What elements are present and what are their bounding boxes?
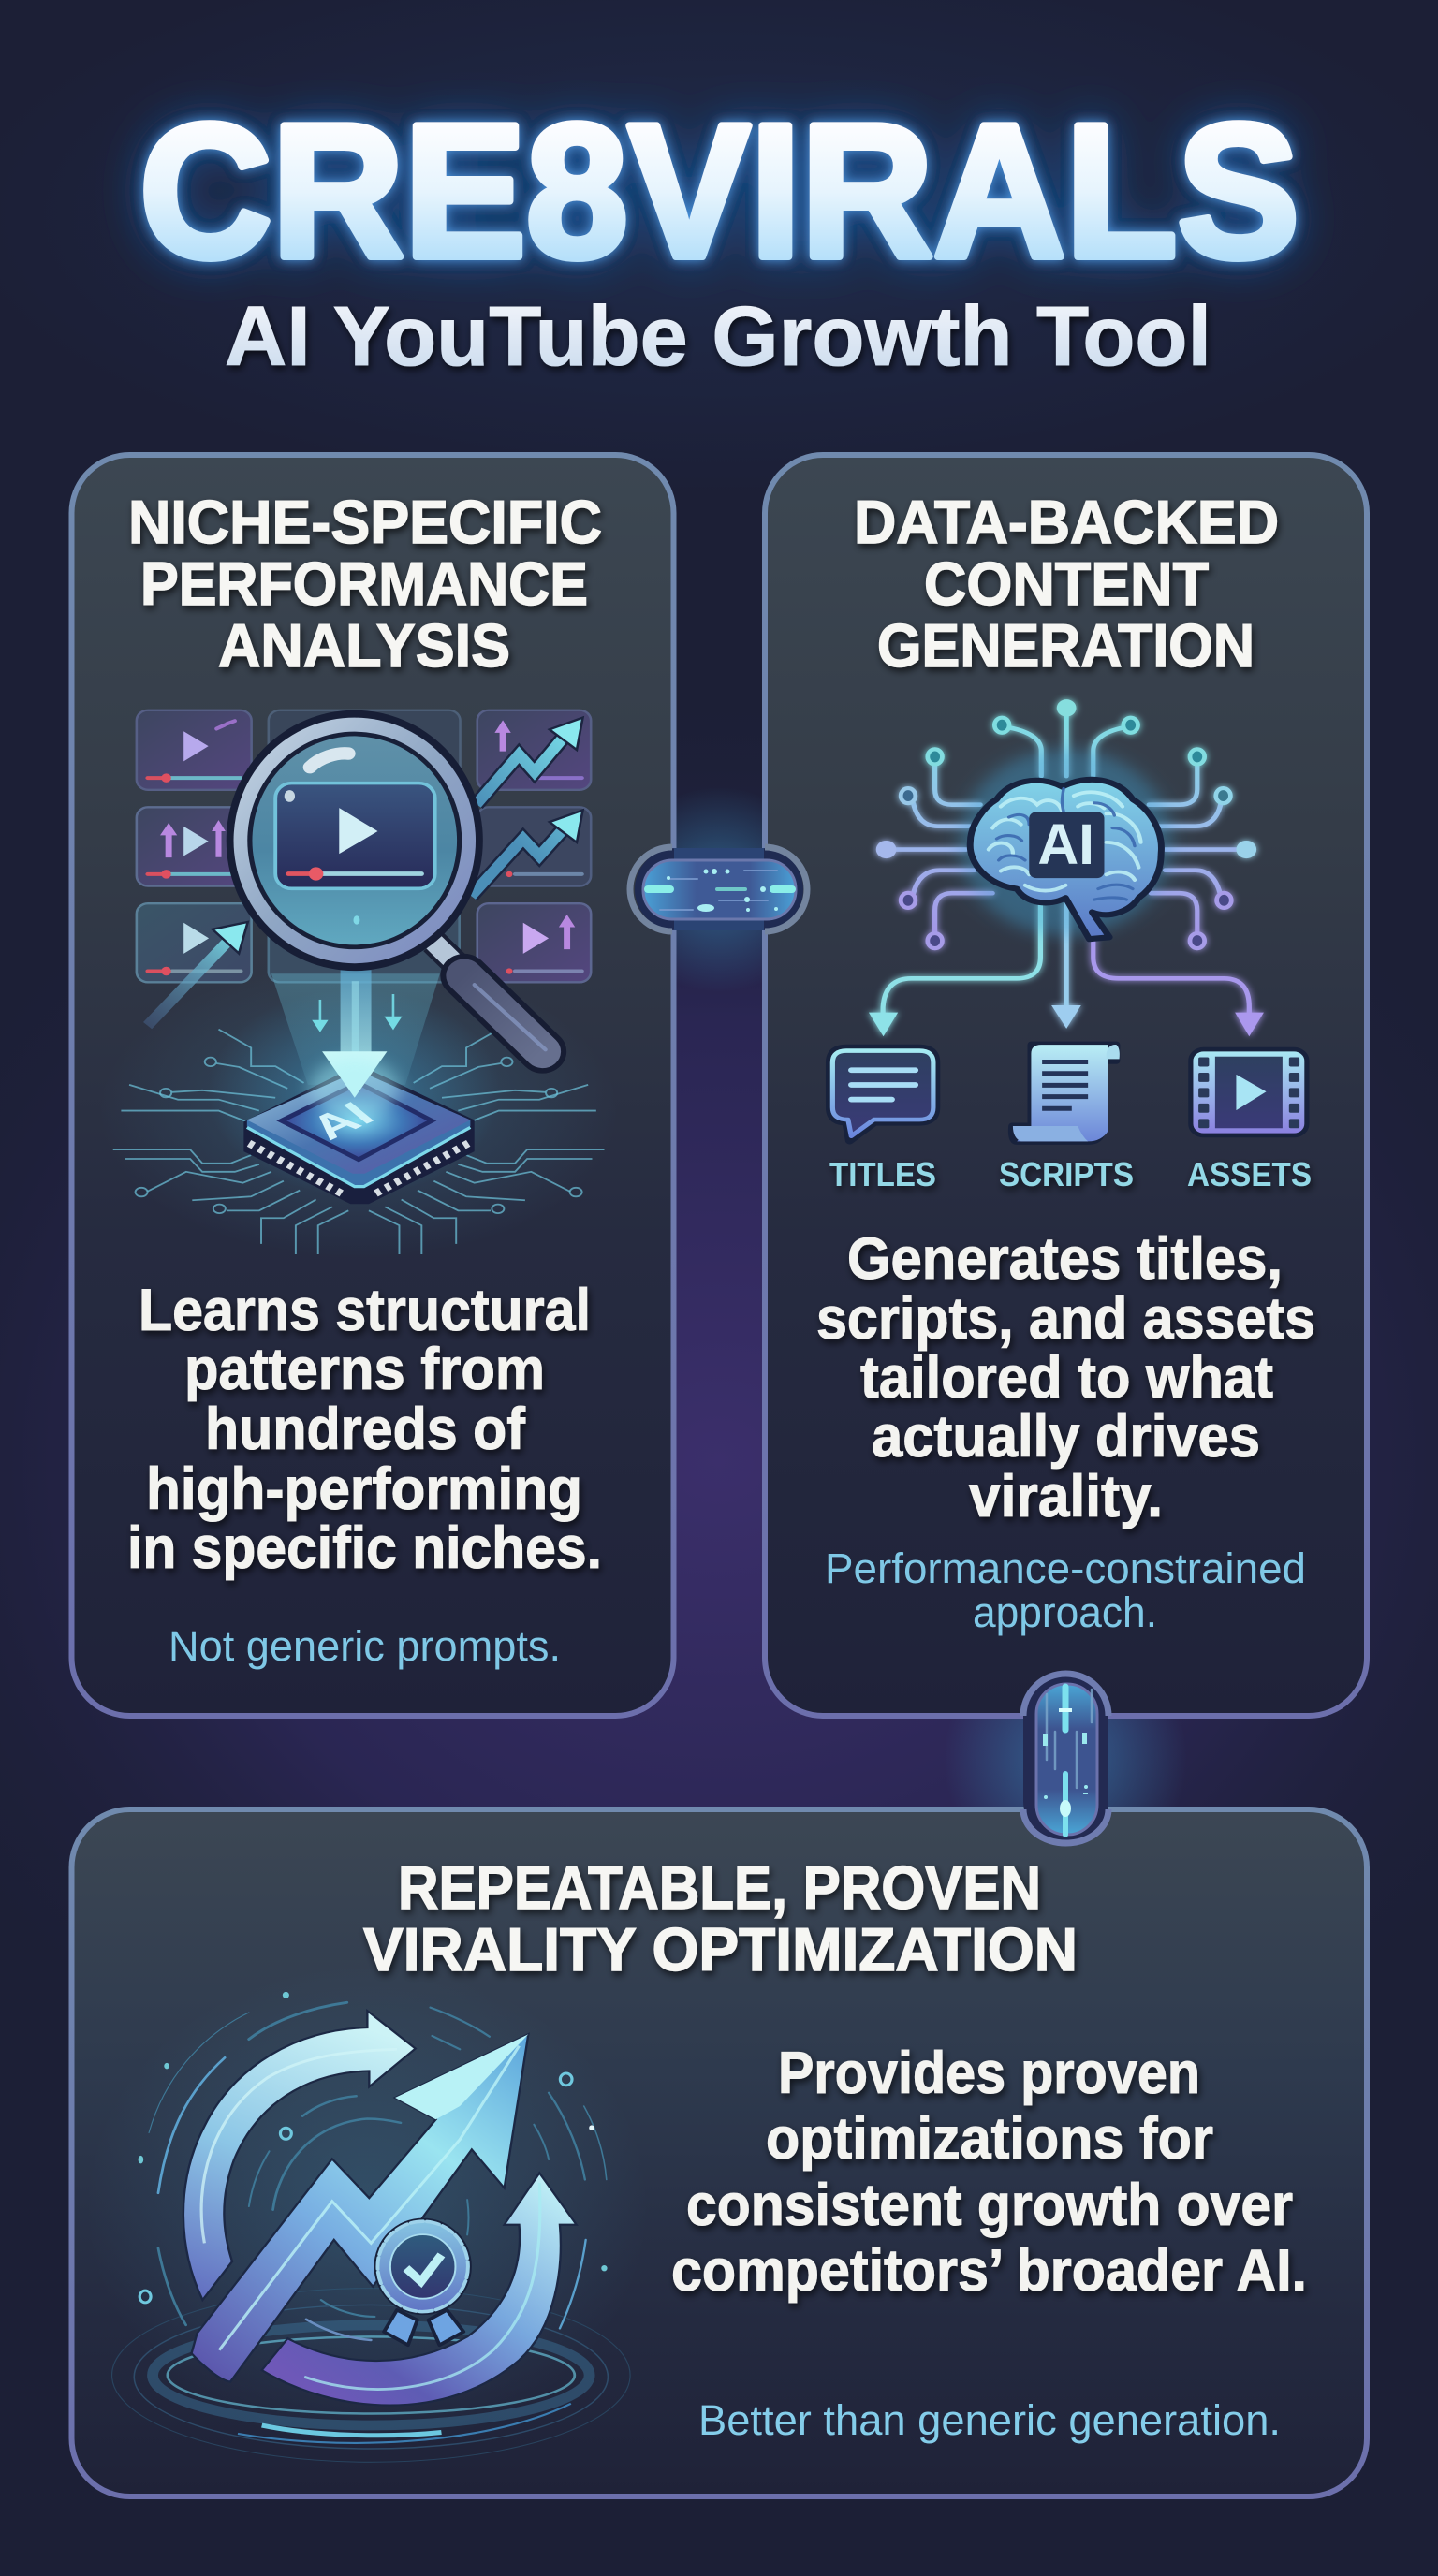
heading: bottom card: REPEATABLE, PROVEN bbox=[398, 1853, 1041, 1922]
heading: bottom card bbox=[363, 1853, 1078, 1983]
loop arrow bottom bbox=[262, 2173, 577, 2406]
icon: scripts scroll bbox=[1012, 1045, 1120, 1141]
chip bbox=[243, 1064, 475, 1204]
connector: left to right cards bbox=[630, 847, 807, 931]
badge bbox=[374, 2218, 472, 2345]
ripples bbox=[112, 2289, 630, 2462]
illustration: magnifier over video thumbnails with AI chip: AI bbox=[299, 1094, 384, 1147]
body text: left card: patterns from bbox=[184, 1337, 545, 1402]
panel background: bottom card bbox=[71, 1809, 1367, 2496]
illustration: AI brain with output arrows bbox=[830, 699, 1307, 1141]
body text: right card bbox=[816, 1226, 1315, 1530]
magnifier lens bbox=[227, 710, 483, 971]
icon labels: SCRIPTS bbox=[999, 1155, 1134, 1193]
body text: right card: actually drives bbox=[872, 1404, 1260, 1470]
note: performance-constrained approach: approach. bbox=[973, 1588, 1157, 1636]
heading: left card: PERFORMANCE bbox=[140, 549, 588, 618]
body text: left card: Learns structural bbox=[139, 1278, 591, 1343]
body text: bottom card: optimizations for bbox=[766, 2106, 1213, 2172]
panel background: left card bbox=[71, 455, 674, 1716]
subtitle: AI YouTube Growth Tool bbox=[225, 290, 1211, 384]
sparkles bbox=[139, 1992, 608, 2271]
illustration: growth arrow loop with badge bbox=[86, 1966, 649, 2462]
note: performance-constrained approach bbox=[825, 1544, 1306, 1636]
icon: assets film strip bbox=[1191, 1049, 1307, 1135]
icon labels: ASSETS bbox=[1187, 1155, 1312, 1193]
body text: left card: hundreds of bbox=[205, 1397, 526, 1462]
heading: right card: DATA-BACKED bbox=[854, 488, 1279, 556]
body text: bottom card: competitors’ broader AI. bbox=[671, 2238, 1307, 2304]
connector: right card to bottom card bbox=[1023, 1674, 1108, 1843]
body text: bottom card: Provides proven bbox=[778, 2041, 1200, 2106]
panel: niche-specific performance analysis bbox=[71, 455, 674, 1716]
body text: bottom card: consistent growth over bbox=[686, 2173, 1293, 2238]
heading: left card: ANALYSIS bbox=[218, 611, 510, 680]
orbit arcs bbox=[149, 2002, 607, 2340]
beam and data arrow bbox=[271, 973, 440, 1085]
heading: left card: NICHE-SPECIFIC bbox=[128, 488, 602, 556]
title: CRE8VIRALS: CRE8VIRALS bbox=[139, 85, 1299, 298]
thumbnails bbox=[137, 710, 591, 982]
body text: bottom card bbox=[671, 2041, 1307, 2304]
icon: titles speech bubble bbox=[830, 1048, 936, 1140]
brain bbox=[961, 749, 1171, 935]
note: better than generic generation: Better than generic generation. bbox=[698, 2396, 1281, 2444]
icon labels bbox=[829, 1155, 1312, 1193]
heading: right card: GENERATION bbox=[877, 611, 1255, 680]
note: not generic prompts: Not generic prompts. bbox=[169, 1622, 561, 1670]
rising arrows bbox=[148, 731, 570, 1026]
note: performance-constrained approach: Performance-constrained bbox=[825, 1544, 1306, 1592]
icon labels: TITLES bbox=[829, 1155, 936, 1193]
magnifier handle bbox=[433, 943, 462, 970]
body text: left card: in specific niches. bbox=[127, 1515, 602, 1581]
panel: repeatable, proven virality optimization bbox=[71, 1809, 1367, 2496]
body text: right card: Generates titles, bbox=[847, 1226, 1283, 1292]
heading: bottom card: VIRALITY OPTIMIZATION bbox=[363, 1915, 1078, 1983]
heading: left card bbox=[128, 488, 602, 680]
body text: right card: tailored to what bbox=[860, 1345, 1273, 1411]
illustration: AI brain with output arrows: AI bbox=[1037, 812, 1094, 876]
panel background: right card bbox=[765, 455, 1367, 1716]
panel: data-backed content generation bbox=[765, 455, 1367, 1716]
body text: left card: high-performing bbox=[146, 1456, 582, 1522]
illustration: magnifier over video thumbnails with AI chip bbox=[99, 710, 619, 1259]
body text: right card: scripts, and assets bbox=[816, 1286, 1315, 1352]
body text: left card bbox=[127, 1278, 602, 1581]
heading: right card bbox=[854, 488, 1279, 680]
heading: right card: CONTENT bbox=[924, 549, 1209, 618]
body text: right card: virality. bbox=[969, 1464, 1163, 1530]
zigzag arrow bbox=[192, 2034, 528, 2382]
loop arrow top bbox=[183, 2011, 416, 2300]
